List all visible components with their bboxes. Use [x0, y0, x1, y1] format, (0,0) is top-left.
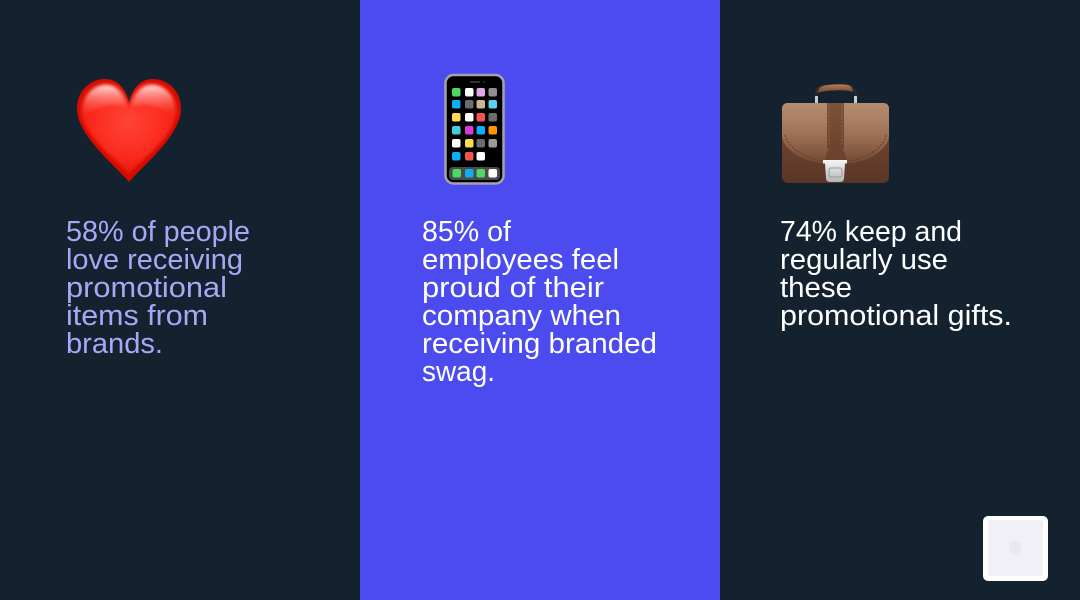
panel: right background: [720, 0, 1080, 600]
text: 85% statistic: swag.: [422, 356, 495, 388]
text: 58% statistic: [66, 216, 250, 360]
icon: briefcase: [782, 84, 889, 183]
text: 74% statistic: these: [780, 272, 852, 304]
text: 58% statistic: promotional: [66, 272, 227, 304]
text: 74% statistic: [780, 216, 1012, 332]
text: 74% statistic: regularly use: [780, 244, 948, 276]
text: 85% statistic: receiving branded: [422, 328, 657, 360]
icon: smartphone: [446, 75, 504, 184]
text: 58% statistic: love receiving: [66, 244, 243, 276]
text: 74% statistic: promotional gifts.: [780, 300, 1012, 332]
text: 85% statistic: proud of their: [422, 272, 605, 304]
panel: centre background: [360, 0, 720, 600]
text: 58% statistic: brands.: [66, 328, 163, 360]
text: 85% statistic: employees feel: [422, 244, 619, 276]
icon: red heart: [77, 79, 181, 182]
text: 58% statistic: items from: [66, 300, 208, 332]
text: 85% statistic: [422, 216, 657, 388]
text: 85% statistic: company when: [422, 300, 621, 332]
panel: left background: [0, 0, 360, 600]
badge: logo placeholder: [983, 516, 1048, 581]
text: 74% statistic: 74% keep and: [780, 216, 962, 248]
text: 58% statistic: 58% of people: [66, 216, 250, 248]
text: 85% statistic: 85% of: [422, 216, 511, 248]
